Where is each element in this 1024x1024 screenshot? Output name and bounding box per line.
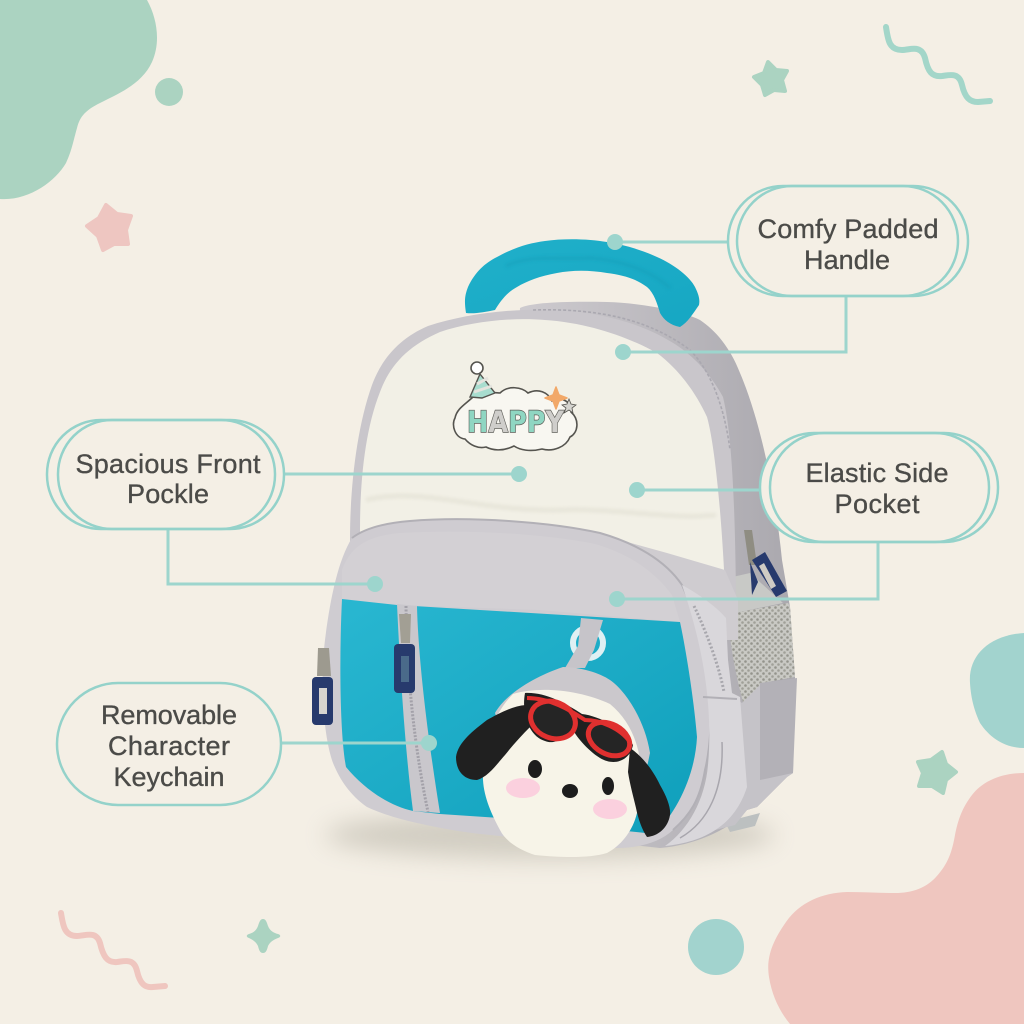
decorative blob: teal right [970, 633, 1024, 748]
decorative circle: green [155, 78, 183, 106]
decorative star: green top [754, 62, 787, 95]
side lower gusset [715, 683, 793, 830]
happy text: HAPPY [467, 405, 565, 439]
pocket zipper strip [397, 604, 440, 813]
callout: removable character keychain: Character [108, 731, 230, 761]
pouch back [495, 667, 650, 800]
decorative blob: green top left [0, 0, 157, 199]
callout: elastic side pocket: Pocket [834, 489, 920, 519]
front panel rim [350, 310, 736, 600]
callout: spacious front pocket: Pockle [127, 479, 209, 509]
keychain ring and strap [565, 618, 603, 668]
decorative star: green right [918, 752, 956, 793]
orange star [545, 387, 567, 409]
keychain character [456, 667, 670, 857]
decorative squiggle: green top right [886, 27, 990, 102]
callout: comfy padded handle: Comfy Padded [758, 214, 938, 244]
side elastic [728, 573, 783, 614]
callout: spacious front pocket: Spacious Front [76, 449, 261, 479]
front panel white [360, 319, 725, 590]
side zipper pocket [665, 585, 747, 846]
decorative squiggle: pink bottom left [61, 913, 165, 987]
front zipper pull [394, 614, 415, 693]
left ear [456, 705, 530, 780]
callout: comfy padded handle [728, 186, 968, 296]
callout: removable character keychain: Keychain [114, 762, 224, 792]
sunglasses [524, 693, 635, 763]
logo: happy cloud [453, 362, 577, 450]
decorative blob: pink bottom right [768, 773, 1024, 1024]
decorative star: green bottom [247, 919, 280, 953]
left zipper pull [312, 648, 333, 725]
callout: elastic side pocket [760, 433, 998, 542]
right ear [628, 748, 670, 837]
callout: removable character keychain [57, 683, 281, 805]
decorative circle: teal bottom [688, 919, 744, 975]
callout: spacious front pocket [47, 420, 284, 529]
face [483, 690, 641, 857]
side pocket mesh [728, 603, 795, 702]
side pocket lower band [760, 678, 797, 780]
side zipper pull [744, 530, 787, 597]
ground shadow [325, 811, 775, 859]
grey star [562, 399, 576, 413]
eyes and nose [528, 760, 542, 778]
cheeks [506, 778, 540, 798]
callout: removable character keychain: Removable [101, 700, 237, 730]
pocket blue panel [340, 599, 697, 834]
foot strap [725, 813, 760, 832]
side and rear body [500, 302, 795, 848]
pocket grey top panel [342, 532, 680, 622]
front pocket rim [323, 519, 711, 848]
party hat [470, 374, 495, 398]
backpack illustration [312, 239, 797, 859]
connector dots [367, 234, 645, 751]
connector lines [168, 242, 878, 743]
handle [465, 239, 699, 327]
callout: elastic side pocket: Elastic Side [806, 458, 948, 488]
callout: comfy padded handle: Handle [804, 245, 890, 275]
cloud [453, 388, 577, 450]
area right of pocket top [620, 540, 738, 640]
decorative star: pink [87, 205, 131, 250]
